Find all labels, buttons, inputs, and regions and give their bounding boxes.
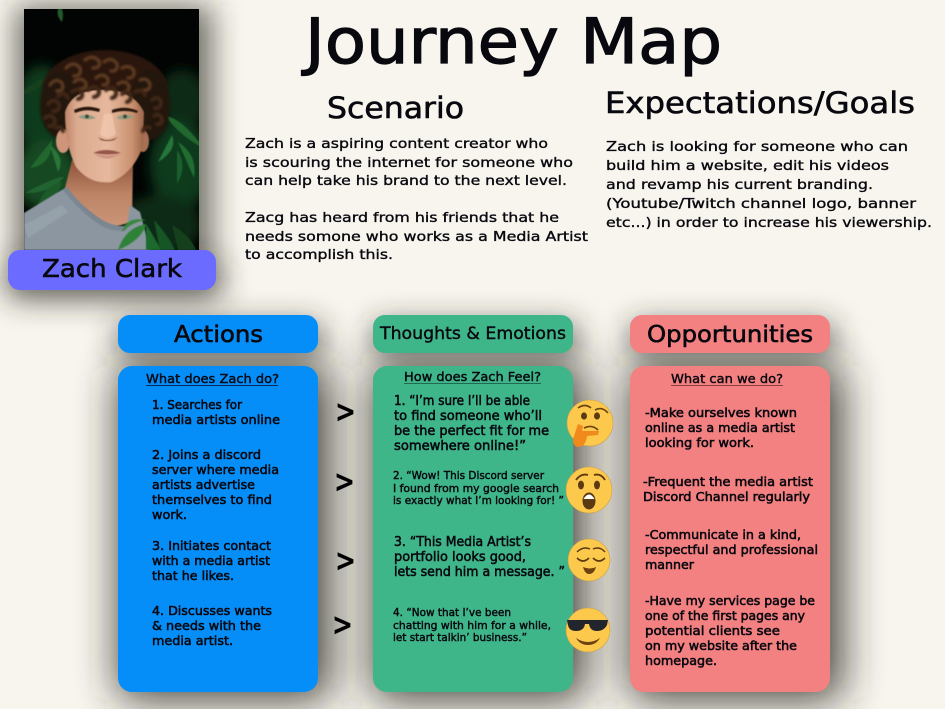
- action 1: media artists online: [152, 413, 280, 428]
- action 3: [152, 539, 271, 584]
- thought 2: I found from my google search: [393, 482, 559, 495]
- action 1: 1. Searches for: [152, 398, 243, 413]
- panel: actions: [118, 366, 318, 692]
- action 4: & needs with the: [152, 619, 261, 634]
- thought 2: 2. “Wow! This Discord server: [393, 469, 544, 482]
- brows, eyes, nose, mouth: [74, 107, 138, 158]
- ears: [56, 129, 70, 153]
- action 4: 4. Discusses wants: [152, 604, 272, 619]
- header: Opportunities: [630, 315, 830, 353]
- thought 4: let start talkin’ business.”: [393, 631, 527, 644]
- action 4: media artist.: [152, 634, 233, 649]
- opportunity 2: Discord Channel regularly: [643, 490, 810, 505]
- panel: opportunities: [630, 366, 830, 692]
- action 2: server where media: [152, 463, 279, 478]
- subheading: what can we do: What can we do?: [671, 372, 783, 387]
- opportunity 3: manner: [645, 558, 695, 573]
- icon: surprised emoji: [566, 467, 612, 513]
- hair: [40, 50, 170, 140]
- panel: thoughts and emotions: [373, 366, 573, 692]
- action 2: themselves to find: [152, 493, 272, 508]
- thought 4: [393, 606, 551, 644]
- opportunity 2: -Frequent the media artist: [643, 475, 813, 490]
- action 3: with a media artist: [152, 554, 270, 569]
- subheading: how does Zach feel: How does Zach Feel?: [404, 370, 541, 385]
- thought 4: 4. “Now that I’ve been: [393, 606, 511, 619]
- foreground leaves: [118, 219, 196, 250]
- text: expectations: and revamp his current branding.: [606, 177, 873, 193]
- icon: thinking emoji: [567, 400, 613, 447]
- text: scenario: Zach is a aspiring content creator who: [245, 136, 548, 152]
- face: [65, 90, 144, 182]
- opportunity 4: [645, 594, 815, 669]
- text: scenario: can help take his brand to the next level.: [245, 173, 567, 189]
- opportunity 3: [645, 528, 818, 573]
- header: Opportunities: Opportunities: [647, 322, 813, 348]
- text: expectations: build him a website, edit his videos: [606, 158, 889, 174]
- text: expectations: [606, 139, 932, 231]
- opportunity 4: on my website after the: [645, 639, 797, 654]
- thought 3: [394, 535, 565, 580]
- text: expectations: Zach is looking for someone who can: [606, 139, 908, 155]
- name badge: Zach Clark: [8, 250, 216, 290]
- thought 3: lets send him a message. ”: [394, 565, 565, 580]
- arrow 4: >: [332, 607, 353, 643]
- text: scenario: Zacg has heard from his friends that he: [245, 210, 559, 226]
- thought 1: to find someone who’ll: [394, 409, 542, 424]
- text: scenario: to accomplish this.: [245, 247, 393, 263]
- opportunity 1: -Make ourselves known: [645, 406, 797, 421]
- action 3: 3. Initiates contact: [152, 539, 271, 554]
- text: expectations: etc...) in order to increase his viewership.: [606, 215, 932, 231]
- shirt: [24, 187, 150, 250]
- text: scenario: [245, 136, 588, 263]
- heading: Expectations/Goals: Expectations/Goals: [605, 86, 915, 120]
- thought 3: portfolio looks good,: [394, 550, 526, 565]
- action 2: [152, 448, 279, 523]
- opportunity 1: looking for work.: [645, 436, 754, 451]
- thought 1: be the perfect fit for me: [394, 424, 549, 439]
- action 2: artists advertise: [152, 478, 255, 493]
- thought 2: is exactly what I’m looking for! ”: [393, 494, 564, 507]
- thought 1: [394, 394, 549, 454]
- action 2: work.: [152, 508, 187, 523]
- thought 3: 3. “This Media Artist’s: [394, 535, 531, 550]
- opportunity 4: one of the first pages any: [645, 609, 805, 624]
- thought 4: chatting with him for a while,: [393, 619, 551, 632]
- opportunity 4: -Have my services page be: [645, 594, 815, 609]
- curls: [45, 57, 162, 131]
- title: Journey Map: [301, 5, 722, 78]
- text: scenario: is scouring the internet for someone who: [245, 155, 573, 171]
- opportunity 1: online as a media artist: [645, 421, 795, 436]
- header: Thoughts & Emotions: [373, 315, 573, 353]
- heading: Scenario: Scenario: [327, 91, 464, 125]
- action 2: 2. Joins a discord: [152, 448, 261, 463]
- opportunity 4: potential clients see: [645, 624, 780, 639]
- arrow 3: >: [335, 543, 356, 579]
- header: Thoughts & Emotions: Thoughts & Emotions: [379, 324, 566, 344]
- subheading: what does Zach do: What does Zach do?: [146, 372, 279, 387]
- opportunity 3: respectful and professional: [645, 543, 818, 558]
- opportunity 3: -Communicate in a kind,: [645, 528, 801, 543]
- opportunity 1: [645, 406, 797, 451]
- action 4: [152, 604, 272, 649]
- header: Actions: Actions: [174, 322, 263, 348]
- opportunity 2: [643, 475, 813, 505]
- thought 1: somewhere online!”: [394, 439, 526, 454]
- text: expectations: (Youtube/Twitch channel logo, banner: [606, 196, 916, 212]
- icon: relieved emoji: [568, 539, 610, 581]
- neck: [64, 160, 133, 228]
- text: scenario: needs somone who works as a Media Artist: [245, 229, 588, 245]
- opportunity 4: homepage.: [645, 654, 717, 669]
- action 3: that he likes.: [152, 569, 234, 584]
- thought 2: [393, 469, 564, 507]
- arrow 2: >: [334, 464, 355, 500]
- arrow 1: >: [335, 394, 356, 430]
- portrait photo: [24, 9, 199, 250]
- thought 1: 1. “I’m sure I’ll be able: [394, 394, 530, 409]
- action 1: [152, 398, 280, 428]
- name badge: Zach Clark: Zach Clark: [42, 254, 183, 283]
- icon: sunglasses emoji: [566, 608, 610, 652]
- header: Actions: [118, 315, 318, 353]
